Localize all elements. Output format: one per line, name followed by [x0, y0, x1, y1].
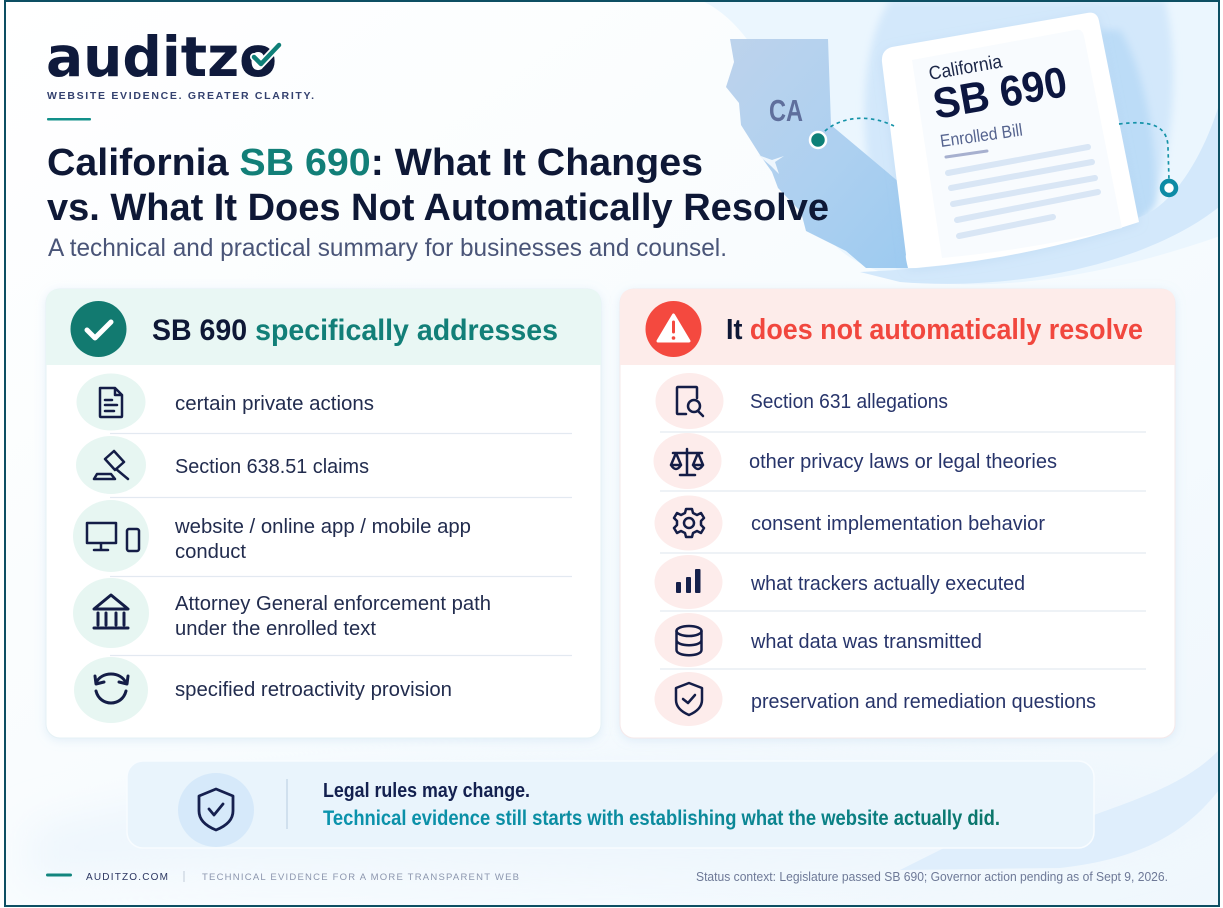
- title: California SB 690: What It Changes: [47, 142, 703, 184]
- row: data transmitted: what data was transmitted: [750, 631, 982, 653]
- document title: California: [927, 51, 1004, 85]
- row: section 631: Section 631 allegations: [750, 391, 948, 413]
- enrolled bill document: [882, 13, 1139, 268]
- title: vs. What It Does Not Automatically Resolve: [47, 187, 829, 229]
- document lines: [946, 147, 1098, 236]
- callout text: Technical evidence still starts with establishing what the website actually did.: [323, 807, 1000, 830]
- row: privacy laws: other privacy laws or legal theories: [749, 451, 1057, 473]
- check badge: [70, 301, 126, 357]
- footer left: AUDITZO.COM: [86, 872, 168, 883]
- footer status note: Status context: Legislature passed SB 690; Governor action pending as of Sept 9, 2026.: [696, 870, 1168, 884]
- panel heading: It does not automatically resolve: [726, 314, 1143, 346]
- title: [47, 142, 829, 229]
- row: private actions: [76, 374, 374, 430]
- row: section 631: [656, 373, 948, 429]
- bay inlet: [758, 155, 784, 174]
- footer left: [46, 871, 519, 883]
- row: section 638.51: [76, 436, 369, 494]
- row: data transmitted: [654, 613, 982, 667]
- panel: does not resolve: [620, 289, 1175, 738]
- row: privacy laws: [654, 433, 1057, 489]
- row: website and app: [73, 500, 471, 572]
- accent rule: [47, 118, 91, 120]
- enrolled bill document: SB 690: [929, 58, 1071, 129]
- subtitle: A technical and practical summary for businesses and counsel.: [48, 234, 727, 262]
- california map: [726, 39, 917, 268]
- row: retroactivity: [74, 657, 452, 723]
- logo: auditzo: [46, 25, 277, 89]
- connector: document to node: [1119, 123, 1176, 195]
- row: consent behaviour: consent implementation behavior: [751, 513, 1045, 535]
- footer left: TECHNICAL EVIDENCE FOR A MORE TRANSPARENT WEB: [202, 872, 519, 883]
- row: section 638.51: Section 638.51 claims: [175, 456, 369, 478]
- warning badge: [646, 301, 702, 357]
- row: trackers: what trackers actually executed: [750, 573, 1025, 595]
- tagline: WEBSITE EVIDENCE. GREATER CLARITY.: [47, 90, 314, 102]
- row: trackers: [654, 555, 1025, 609]
- callout text: Legal rules may change.: [323, 780, 530, 802]
- callout: [127, 761, 1094, 848]
- row: attorney general: [73, 578, 491, 648]
- panel header: [46, 289, 601, 365]
- row: website and app: website / online app / mobile app: [174, 516, 471, 538]
- state label: CA: [769, 93, 803, 128]
- row: consent behaviour: [654, 496, 1045, 550]
- row: attorney general: under the enrolled text: [175, 618, 376, 640]
- row: retroactivity: specified retroactivity provision: [175, 679, 452, 701]
- row: website and app: conduct: [175, 541, 246, 563]
- shield icon: [178, 773, 254, 847]
- row: attorney general: Attorney General enforcement path: [175, 593, 491, 615]
- callout text: [323, 780, 1000, 830]
- row: preservation: preservation and remediation questions: [751, 691, 1096, 713]
- row: private actions: certain private actions: [175, 393, 374, 415]
- enrolled bill document: Enrolled Bill: [939, 120, 1024, 151]
- row: preservation: [654, 672, 1096, 726]
- connector: map to document: [810, 118, 894, 148]
- logo check mark: [254, 45, 279, 64]
- panel heading: SB 690 specifically addresses: [152, 314, 558, 347]
- panel header: [620, 289, 1175, 365]
- panel: specifically addresses: [46, 289, 601, 738]
